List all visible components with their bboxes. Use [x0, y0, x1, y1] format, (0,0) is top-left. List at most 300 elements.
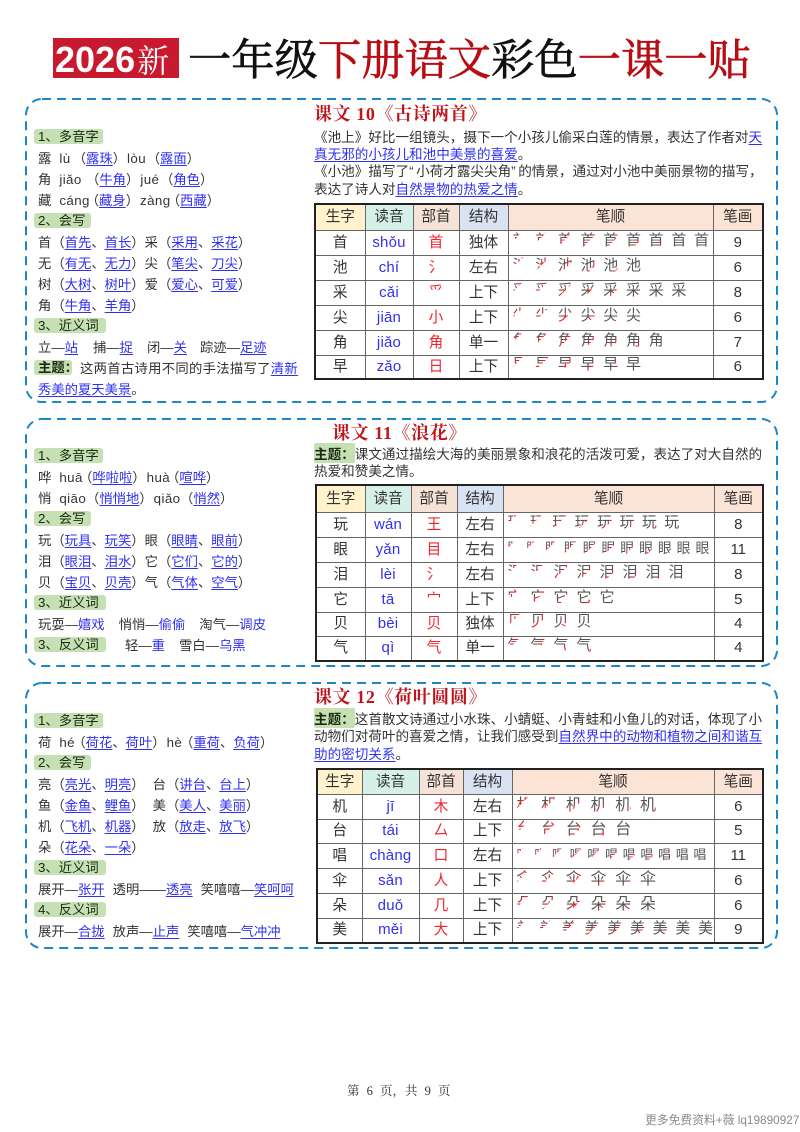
row: 贝: 4	[734, 615, 742, 632]
row: 伞	[332, 870, 742, 888]
row: 唱: 唱	[605, 846, 618, 862]
row: 池: 左右	[469, 260, 498, 276]
lesson 10 word list: 首（首先、首长）采（采用、采花）	[38, 235, 251, 250]
table: lesson 12 characters	[316, 768, 764, 944]
panel: lesson 10	[25, 98, 778, 403]
row: 首: 首	[535, 232, 550, 248]
row: 贝: 贝	[576, 613, 592, 630]
lesson 11 word list: huà	[147, 470, 170, 485]
row: 角: 角	[558, 332, 573, 348]
row: 角: 7	[734, 334, 742, 350]
row: 朵: 上下	[473, 898, 502, 914]
row: 唱: 唱	[552, 846, 565, 862]
row: 美	[332, 920, 742, 938]
row: 朵: 朵	[516, 896, 533, 912]
lesson 11 heading: 课文 11《浪花》	[332, 423, 467, 443]
row: 池: 池	[603, 256, 618, 274]
lesson 10 word list: jué	[140, 172, 159, 187]
row: 美: 美	[630, 920, 645, 937]
lesson 12 word list: hé	[59, 734, 75, 750]
row: 采: 采	[626, 282, 641, 298]
row: 玩: 玩	[508, 514, 523, 530]
row: 首: 首	[581, 232, 596, 248]
row: 玩: 玩	[552, 514, 567, 530]
row: 唱: 唱	[516, 846, 530, 862]
row: 泪: 泪	[333, 566, 348, 582]
table header: 生字	[326, 209, 355, 225]
row: 它: 它	[333, 592, 348, 608]
lesson 11 word list: 2、会写	[38, 511, 85, 526]
row: 美: 美	[585, 920, 600, 937]
row: 眼: 眼	[620, 540, 634, 556]
row: 眼	[333, 540, 746, 558]
lesson 11 word list: 贝（宝贝、贝壳）气（气体、空气）	[38, 575, 251, 590]
table header: 部首	[419, 491, 449, 507]
lesson 12 summary: 主题：这首散文诗通过小水珠、小蜻蜓、小青蛙和小鱼儿的对话，体现了小	[314, 708, 762, 728]
row: 台: 台	[591, 821, 607, 838]
row: 美: měi	[378, 921, 403, 938]
row: 采: 爫	[429, 284, 443, 300]
row: 美: 上下	[473, 922, 502, 938]
row: 早: 早	[512, 356, 528, 373]
row: 早: 日	[429, 359, 443, 375]
row: 台: 台	[615, 821, 631, 838]
lesson 11 summary	[314, 443, 762, 480]
row: 玩: 8	[734, 516, 742, 532]
row: 泪: 泪	[668, 564, 684, 580]
row: 伞: 伞	[516, 870, 533, 888]
row: 美: 9	[734, 921, 742, 938]
row: 贝: 贝	[554, 613, 569, 630]
lesson 11 word list: 悄 （悄悄地） （悄然）	[38, 491, 233, 506]
row: 泪: 泪	[622, 564, 638, 580]
row: 玩: 玩	[575, 514, 590, 530]
table header: 生字	[326, 491, 355, 507]
row: 早: 早	[535, 356, 550, 373]
row: 池	[333, 256, 742, 276]
row: 唱: 唱	[658, 846, 671, 862]
row: 机: jī	[387, 798, 394, 814]
row: 它: 5	[734, 590, 742, 608]
table header: 生字	[325, 774, 354, 790]
row: 早: 早	[581, 356, 596, 373]
row: 它: 宀	[427, 592, 441, 608]
row: 美: 美	[332, 922, 347, 938]
row: 美: 美	[653, 920, 668, 937]
row: 采: 8	[734, 284, 742, 300]
row: 它: 它	[530, 588, 546, 606]
row: 它: 它	[600, 588, 615, 606]
table header: 笔画	[723, 209, 752, 225]
lesson 10 word list: 这两首古诗用不同的手法描写了清新	[80, 361, 298, 376]
row: 尖: 小	[429, 310, 443, 326]
row: 美: 美	[516, 920, 532, 937]
lesson 12 word list: 展开—张开 透明——透亮 笑嘻嘻—笑呵呵	[38, 882, 294, 896]
lesson 11 summary: 主题：课文通过描绘大海的美丽景象和浪花的活泼可爱，表达了对大自然的	[314, 443, 762, 463]
row: 机: 6	[734, 798, 742, 814]
row: 朵: 几	[434, 898, 448, 914]
row: 伞: 伞	[640, 870, 656, 888]
lesson 10 word list: lù	[59, 151, 71, 166]
row: 台	[332, 820, 742, 839]
row: 美: 美	[675, 920, 690, 937]
row: 机: 机	[640, 796, 656, 814]
row: 角: 角	[581, 332, 596, 348]
row: 机	[332, 796, 742, 814]
row: 玩: 玩	[597, 514, 612, 530]
row: 尖: 尖	[512, 306, 528, 324]
row: 尖: 6	[734, 308, 742, 326]
row: 首: 首	[649, 232, 664, 248]
row: 贝	[333, 613, 742, 632]
row: 玩: 左右	[465, 516, 495, 532]
row: 朵: 朵	[541, 896, 557, 912]
lesson 12 word list: 朵（花朵、一朵）	[38, 840, 145, 854]
row: 眼: yǎn	[376, 540, 400, 558]
row: 朵: 朵	[591, 896, 607, 912]
row: 伞: 伞	[566, 870, 582, 888]
row: 早: 早	[603, 356, 618, 373]
table header: 部首	[421, 209, 451, 225]
row: 眼: 眼	[545, 540, 559, 556]
lesson 10 word list: 角（牛角、羊角）	[38, 298, 145, 313]
row: 眼: 眼	[677, 540, 691, 556]
row: 贝: 贝	[333, 616, 348, 632]
row: 贝: 贝	[427, 616, 441, 632]
row: 它: tā	[382, 590, 394, 608]
lesson 10 word list: 立—站 捕—捉 闭—关 踪迹—足迹	[38, 340, 267, 355]
lesson 12 word list	[34, 712, 294, 939]
row: 眼: 眼	[564, 540, 578, 556]
row: 首: 9	[734, 234, 742, 250]
row: 尖: 尖	[626, 306, 641, 324]
row: 角: 单一	[469, 334, 498, 350]
row: 角: 角	[512, 332, 528, 348]
row: 气: 气	[427, 640, 441, 656]
row: 气: 4	[734, 639, 742, 656]
row: 采: 上下	[469, 284, 498, 300]
lesson 10 word list: 1、多音字	[38, 129, 99, 144]
row: 早: 6	[734, 358, 742, 375]
lesson 12 summary: 助的密切关系。	[314, 743, 409, 763]
row: 朵: 6	[734, 896, 742, 914]
row: 泪: lèi	[380, 566, 396, 582]
row: 伞: 6	[734, 872, 742, 888]
row: 台: 5	[734, 822, 742, 839]
row: 美: 大	[434, 922, 448, 938]
lesson 10 summary: 真无邪的小孩儿和池中美景的喜爱。	[314, 143, 531, 163]
table header: 结构	[469, 209, 498, 225]
table header: 读音	[376, 774, 405, 790]
lesson 10 word list: 主题：	[38, 360, 78, 375]
table: lesson 10 characters	[314, 203, 764, 380]
lesson 12 word list: 荷 （荷花、荷叶） （重荷、负荷）	[38, 734, 273, 750]
table header: 部首	[426, 774, 456, 790]
row: 泪: 泪	[576, 564, 592, 580]
row: 玩: 玩	[333, 516, 348, 532]
lesson 12 word list: 机（飞机、机器） 放（放走、放飞）	[38, 818, 259, 834]
row: 采: cǎi	[379, 284, 399, 300]
row: 台: tái	[382, 822, 399, 839]
table header: 读音	[373, 491, 403, 507]
row: 采: 采	[512, 282, 528, 298]
lesson 10 word list	[34, 129, 298, 397]
row: 贝: 贝	[530, 613, 546, 630]
row: 机: 左右	[473, 798, 502, 814]
row: 机: 木	[434, 798, 448, 814]
row: 采: 采	[581, 282, 596, 298]
row: 池: 氵	[429, 260, 443, 276]
row: 眼: 眼	[526, 540, 540, 556]
heading text: 一年级下册语文彩色一课一贴	[188, 37, 751, 85]
row: 伞: sǎn	[378, 872, 403, 888]
lesson 11 word list: qiāo	[59, 491, 86, 506]
row: 唱	[332, 846, 746, 864]
row: 美: 美	[607, 920, 622, 937]
row: 朵: 朵	[640, 896, 656, 912]
lesson 12 word list: 3、近义词	[38, 860, 99, 874]
row: 气: 气	[333, 640, 348, 656]
lesson 10 word list: 秀美的夏天美景。	[38, 382, 145, 397]
row: 玩: 玩	[619, 514, 634, 530]
row: 伞: 伞	[541, 870, 557, 888]
row: 采	[333, 282, 742, 300]
lesson 10 word list: 2、会写	[38, 213, 85, 228]
row: 气: 单一	[465, 640, 495, 656]
row: 首	[333, 232, 742, 250]
row: 早: zǎo	[377, 358, 401, 375]
row: 唱: chàng	[370, 846, 411, 864]
lesson 12 word list: 亮（亮光、明亮） 台（讲台、台上）	[38, 776, 259, 792]
row: 朵: duǒ	[378, 896, 403, 914]
row: 唱: 唱	[693, 846, 706, 862]
lesson 12 word list: hè	[167, 734, 182, 750]
row: 尖: jiān	[377, 308, 401, 326]
table: lesson 11 characters	[315, 484, 764, 662]
row: 尖: 尖	[558, 306, 573, 324]
row: 首: 首	[671, 232, 686, 248]
row: 唱: 唱	[676, 846, 689, 862]
lesson 12 word list: 1、多音字	[38, 712, 99, 728]
row: 台: 台	[516, 821, 533, 838]
row: 采: 采	[558, 282, 573, 298]
lesson 11 word list: qiǎo	[154, 491, 180, 506]
row: 贝: 独体	[465, 616, 495, 632]
row: 唱: 唱	[534, 846, 547, 862]
lesson 11 word list: 玩耍—嬉戏 悄悄—偷偷 淘气—调皮	[38, 617, 266, 632]
row: 角: 角	[535, 332, 550, 348]
row: 早: 上下	[469, 359, 498, 375]
row: 玩: 王	[427, 516, 441, 532]
row: 角	[333, 332, 742, 350]
row: 朵: 朵	[615, 896, 631, 912]
lesson 12 summary	[314, 708, 762, 763]
row: 首: 首	[429, 234, 443, 250]
table header: 结构	[473, 774, 502, 790]
row: 角: jiǎo	[377, 334, 401, 350]
row: 泪: 泪	[646, 564, 661, 580]
lesson 10 summary: 《小池》描写了“小荷才露尖尖角”的情景，通过对小池中美丽景物的描写，	[314, 160, 763, 180]
row: 唱: 口	[434, 848, 448, 864]
row: 它: 上下	[465, 592, 495, 608]
lesson 11 word list: 泪（眼泪、泪水）它（它们、它的）	[38, 554, 251, 569]
row: 气: 气	[530, 637, 546, 654]
row: 台: 台	[332, 823, 347, 839]
row: 池: 池	[558, 256, 573, 274]
lesson 11 word list	[34, 448, 266, 653]
row: 采: 采	[671, 282, 686, 298]
row: 尖	[333, 306, 742, 326]
lesson 11 word list: 1、多音字	[38, 448, 99, 463]
row: 机: 机	[566, 796, 582, 814]
row: 眼: 眼	[508, 540, 522, 556]
row: 早	[333, 356, 742, 375]
row: 机: 机	[615, 796, 631, 814]
row: 眼: 眼	[583, 540, 597, 556]
row: 伞: 伞	[332, 872, 347, 888]
row: 角: 角	[649, 332, 664, 348]
panel: lesson 11	[25, 418, 778, 667]
row: 泪: 泪	[508, 564, 523, 580]
row: 唱: 唱	[640, 846, 653, 862]
row: 眼: 11	[730, 540, 746, 558]
watermark: 更多免费资料+薇 lq19890927	[645, 1113, 799, 1127]
lesson 12 word list: 2、会写	[38, 754, 85, 770]
table header	[318, 770, 762, 938]
row: 池: 池	[535, 256, 550, 274]
row: 美: 美	[539, 920, 554, 937]
row: 泪: 氵	[427, 566, 441, 582]
row: 泪	[333, 564, 742, 582]
row: 采: 采	[333, 284, 348, 300]
row: 机: 机	[516, 796, 533, 814]
table header	[317, 486, 762, 656]
lesson 10 summary: 表达了诗人对自然景物的热爱之情。	[314, 178, 531, 198]
row: 唱: 11	[730, 846, 746, 864]
row: 首: 首	[512, 232, 528, 248]
lesson 10 word list: zàng	[140, 193, 171, 208]
row: 池: 池	[581, 256, 596, 274]
row: 气: qì	[382, 639, 394, 656]
lesson 10 heading: 课文 10《古诗两首》	[314, 104, 487, 124]
row: 伞: 上下	[473, 872, 502, 888]
row: 气: 气	[554, 637, 569, 654]
table header: 笔画	[724, 774, 753, 790]
lesson 11 word list: 轻—重 雪白—乌黑	[125, 638, 246, 653]
lesson 10 word list: 角 （牛角） （角色）	[38, 172, 213, 187]
row: 玩: 玩	[530, 514, 545, 530]
row: 泪: 泪	[554, 564, 569, 580]
row: 玩: 玩	[664, 514, 679, 530]
row: 首: shǒu	[372, 234, 406, 250]
row: 首: 首	[603, 232, 618, 248]
row: 池: 池	[626, 256, 641, 274]
lesson 12 summary: 动物们对荷叶的喜爱之情，让我们感受到自然界中的动物和植物之间和谐互	[314, 725, 762, 745]
page number: 第 6 页，共 9 页	[347, 1084, 451, 1098]
lesson 11 word list: 3、近义词	[38, 595, 99, 610]
row: 唱: 唱	[623, 846, 636, 862]
row: 唱: 左右	[473, 848, 502, 864]
row: 早: 早	[558, 356, 573, 373]
row: 角: 角	[333, 334, 348, 350]
row: 玩: 玩	[642, 514, 657, 530]
panel: lesson 12	[25, 682, 778, 949]
row: 美: 美	[562, 920, 577, 937]
row: 尖: 尖	[581, 306, 596, 324]
row: 朵: 朵	[566, 896, 582, 912]
row: 泪: 泪	[530, 564, 546, 580]
lesson 12 word list: 4、反义词	[38, 902, 99, 916]
row: 尖: 尖	[535, 306, 550, 324]
lesson 10 word list: 3、近义词	[38, 318, 99, 333]
lesson 10 summary	[314, 126, 763, 198]
row: 伞: 伞	[591, 870, 607, 888]
lesson 12 word list: 展开—合拢 放声—止声 笑嘻嘻—气冲冲	[38, 924, 281, 938]
row: 唱: 唱	[570, 846, 583, 862]
row: 采: 采	[649, 282, 664, 298]
row: 角: 角	[429, 334, 443, 350]
row: 池: 池	[512, 256, 528, 274]
row: 它: 它	[554, 588, 569, 606]
row: 角: 角	[603, 332, 618, 348]
row: 气: 气	[508, 637, 523, 654]
lesson 11 word list: huā	[59, 470, 83, 485]
row: 台: 台	[541, 821, 557, 838]
row: 尖: 尖	[333, 310, 348, 326]
lesson 10 word list: 无（有无、无力）尖（笔尖、刀尖）	[38, 256, 251, 271]
row: 贝: 贝	[508, 613, 523, 630]
row: 池: chí	[379, 258, 399, 276]
row: 机: 机	[332, 798, 347, 814]
lesson 12 heading: 课文 12《荷叶圆圆》	[314, 687, 487, 707]
table header	[316, 205, 762, 375]
row: 伞: 伞	[615, 870, 631, 888]
table header: 笔顺	[598, 774, 628, 790]
table header: 结构	[465, 491, 495, 507]
title	[53, 37, 751, 85]
table header: 笔顺	[594, 491, 623, 507]
row: 泪: 8	[734, 566, 742, 582]
row: 气	[333, 637, 742, 656]
row: 首: 首	[626, 232, 641, 248]
table header: 笔画	[724, 491, 753, 507]
row: 角: 角	[626, 332, 641, 348]
row: 首: 首	[694, 232, 709, 248]
row: 采: 采	[603, 282, 618, 298]
row: 玩: wán	[374, 516, 402, 532]
row: 眼: 眼	[601, 540, 615, 556]
row: 采: 采	[535, 282, 550, 298]
row: 泪: 左右	[465, 566, 495, 582]
row: 泪: 泪	[600, 564, 615, 580]
row: 尖: 上下	[469, 310, 498, 326]
lesson 10 word list: jiǎo	[59, 172, 82, 187]
row: 池: 池	[333, 260, 348, 276]
lesson 10 summary: 《池上》好比一组镜头，摄下一个小孩儿偷采白莲的情景，表达了作者对天	[314, 126, 762, 146]
row: 伞: 人	[434, 872, 448, 888]
lesson 12 word list: 鱼（金鱼、鲤鱼） 美（美人、美丽）	[38, 798, 259, 812]
row: 唱: 唱	[332, 848, 347, 864]
row: 台: 上下	[473, 823, 502, 839]
lesson 10 word list: 露 （露珠） （露面）	[38, 151, 200, 166]
row: 尖: 尖	[603, 306, 618, 324]
lesson 11 summary: 热爱和赞美之情。	[314, 460, 423, 480]
row: 贝: bèi	[378, 615, 398, 632]
lesson 11 word list: 玩（玩具、玩笑）眼（眼睛、眼前）	[38, 533, 251, 548]
lesson 11 word list: 哗 （哗啦啦） （喧哗）	[38, 470, 219, 485]
row: 台: 厶	[434, 823, 448, 839]
table header: 笔顺	[596, 209, 625, 225]
